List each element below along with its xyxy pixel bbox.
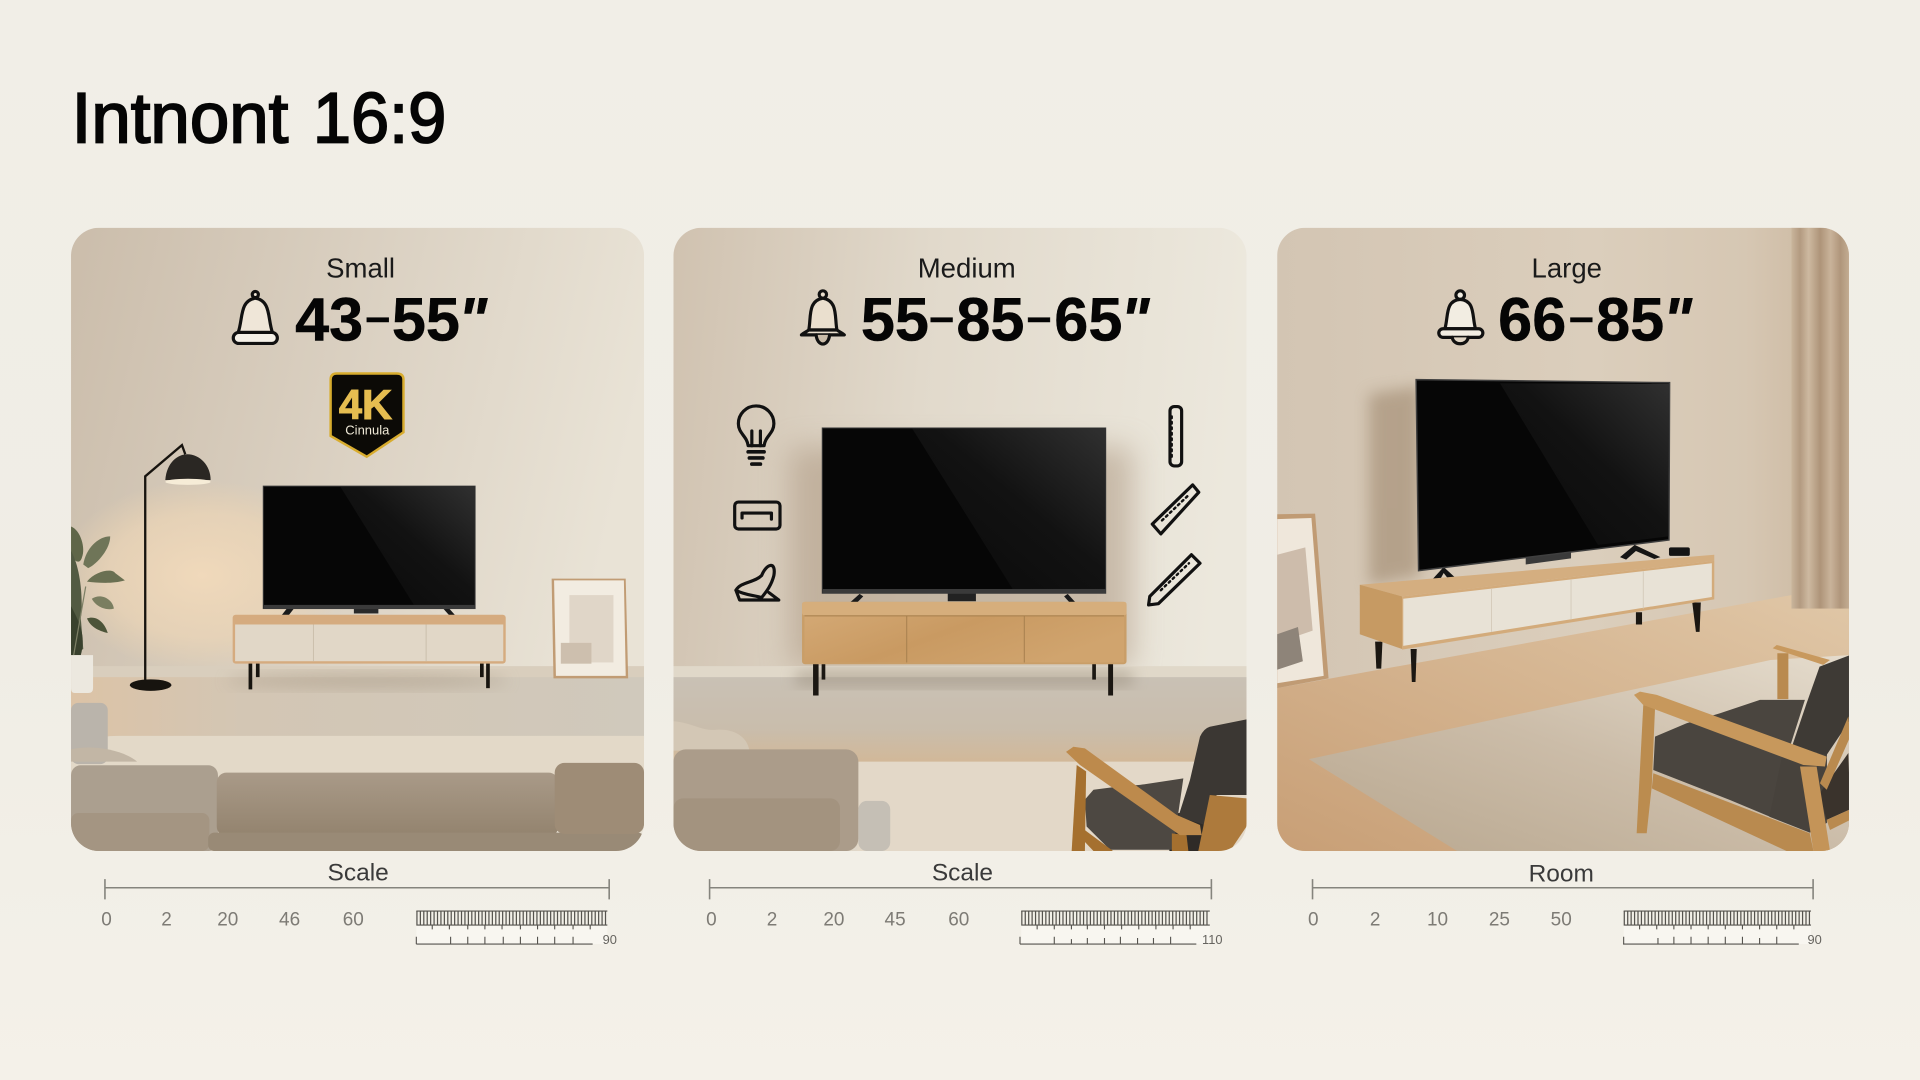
armchair bbox=[1066, 719, 1247, 851]
ruler bbox=[416, 911, 617, 947]
4K badge bbox=[331, 373, 403, 457]
heading: large: 85 bbox=[1596, 285, 1664, 353]
heading: medium: – bbox=[929, 293, 954, 342]
icon: light bulb bbox=[738, 406, 774, 464]
heading: small: 43 bbox=[295, 285, 363, 353]
media console bbox=[233, 615, 506, 689]
scale: medium: 45 bbox=[885, 910, 906, 931]
media console bbox=[802, 602, 1127, 696]
icon: diagonal ruler pencil bbox=[1149, 555, 1200, 605]
scale: room: 25 bbox=[1489, 910, 1510, 931]
scale: room: Room bbox=[1529, 861, 1594, 888]
scale: small: 20 bbox=[217, 910, 238, 931]
icon: bell medium bbox=[801, 291, 844, 344]
heading: large: Large bbox=[1532, 252, 1602, 283]
heading: medium: Medium bbox=[918, 252, 1016, 283]
potted plant bbox=[71, 527, 125, 693]
infographic canvas bbox=[71, 92, 1849, 945]
ruler: 110 bbox=[1202, 932, 1222, 947]
scale: medium: 20 bbox=[823, 910, 844, 931]
title: Intnont bbox=[72, 79, 288, 159]
scale: small: 0 bbox=[101, 910, 112, 931]
heading: small: – bbox=[366, 293, 390, 342]
icon: bell small bbox=[233, 291, 277, 343]
sofa bbox=[673, 721, 890, 851]
title: 16:9 bbox=[313, 79, 446, 159]
icon: diagonal ruler bbox=[1152, 485, 1199, 534]
rug bbox=[1309, 655, 1849, 851]
scale: small: 46 bbox=[279, 910, 300, 931]
icon: seat bbox=[736, 565, 779, 600]
heading: medium bbox=[801, 252, 1150, 353]
heading: large: – bbox=[1569, 293, 1594, 342]
heading: medium: 65 bbox=[1054, 285, 1122, 353]
heading: medium: 55 bbox=[861, 285, 929, 353]
heading: medium: " bbox=[1120, 285, 1150, 353]
icon: vertical ruler bbox=[1170, 407, 1182, 466]
heading: large: 66 bbox=[1498, 285, 1566, 353]
framed print bbox=[552, 579, 628, 678]
armchair and sofa bbox=[71, 703, 644, 851]
ruler bbox=[1623, 911, 1822, 947]
scale: small: 60 bbox=[343, 910, 364, 931]
scale: room: 10 bbox=[1427, 910, 1448, 931]
media console bbox=[1360, 555, 1714, 682]
scale: small: Scale bbox=[328, 859, 389, 886]
curtain bbox=[1791, 228, 1849, 609]
heading: large bbox=[1439, 252, 1693, 353]
panel: large room bbox=[1277, 228, 1850, 851]
framed print bbox=[1277, 514, 1329, 688]
scale: medium bbox=[706, 859, 1222, 947]
heading: small: " bbox=[458, 285, 488, 353]
icon: media box bbox=[735, 502, 780, 529]
ruler bbox=[1020, 911, 1222, 947]
ruler: 90 bbox=[1808, 932, 1822, 947]
heading: medium: – bbox=[1027, 293, 1051, 342]
armchair bbox=[1634, 645, 1850, 851]
scale: room: 0 bbox=[1308, 910, 1319, 931]
icon: bell large bbox=[1439, 291, 1483, 344]
TV: small bbox=[263, 486, 475, 620]
scale: small bbox=[101, 859, 617, 947]
heading: small bbox=[233, 252, 488, 353]
set-top box bbox=[1669, 547, 1690, 556]
floor bbox=[1277, 595, 1849, 851]
scale: room bbox=[1308, 861, 1822, 947]
heading: medium: 85 bbox=[956, 285, 1024, 353]
scale: room: 2 bbox=[1370, 910, 1380, 931]
rug bbox=[71, 736, 644, 777]
floor lamp bbox=[130, 445, 211, 691]
ruler: 90 bbox=[603, 932, 617, 947]
scale: medium: Scale bbox=[932, 859, 993, 886]
scale: room: 50 bbox=[1551, 910, 1572, 931]
TV: medium bbox=[822, 428, 1106, 609]
panel: medium room bbox=[673, 228, 1247, 851]
scale: medium: 2 bbox=[767, 910, 777, 931]
TV: large bbox=[1416, 380, 1670, 584]
scale: small: 2 bbox=[161, 910, 172, 931]
heading: small: 55 bbox=[392, 285, 460, 353]
scale: medium: 60 bbox=[948, 910, 969, 931]
scale: medium: 0 bbox=[706, 910, 717, 931]
heading: small: Small bbox=[326, 252, 395, 283]
4K badge: Cinnula bbox=[345, 423, 390, 438]
heading: large: " bbox=[1663, 285, 1693, 353]
title bbox=[72, 79, 446, 159]
4K badge: 4K bbox=[339, 381, 392, 428]
panel: small room bbox=[58, 228, 644, 851]
